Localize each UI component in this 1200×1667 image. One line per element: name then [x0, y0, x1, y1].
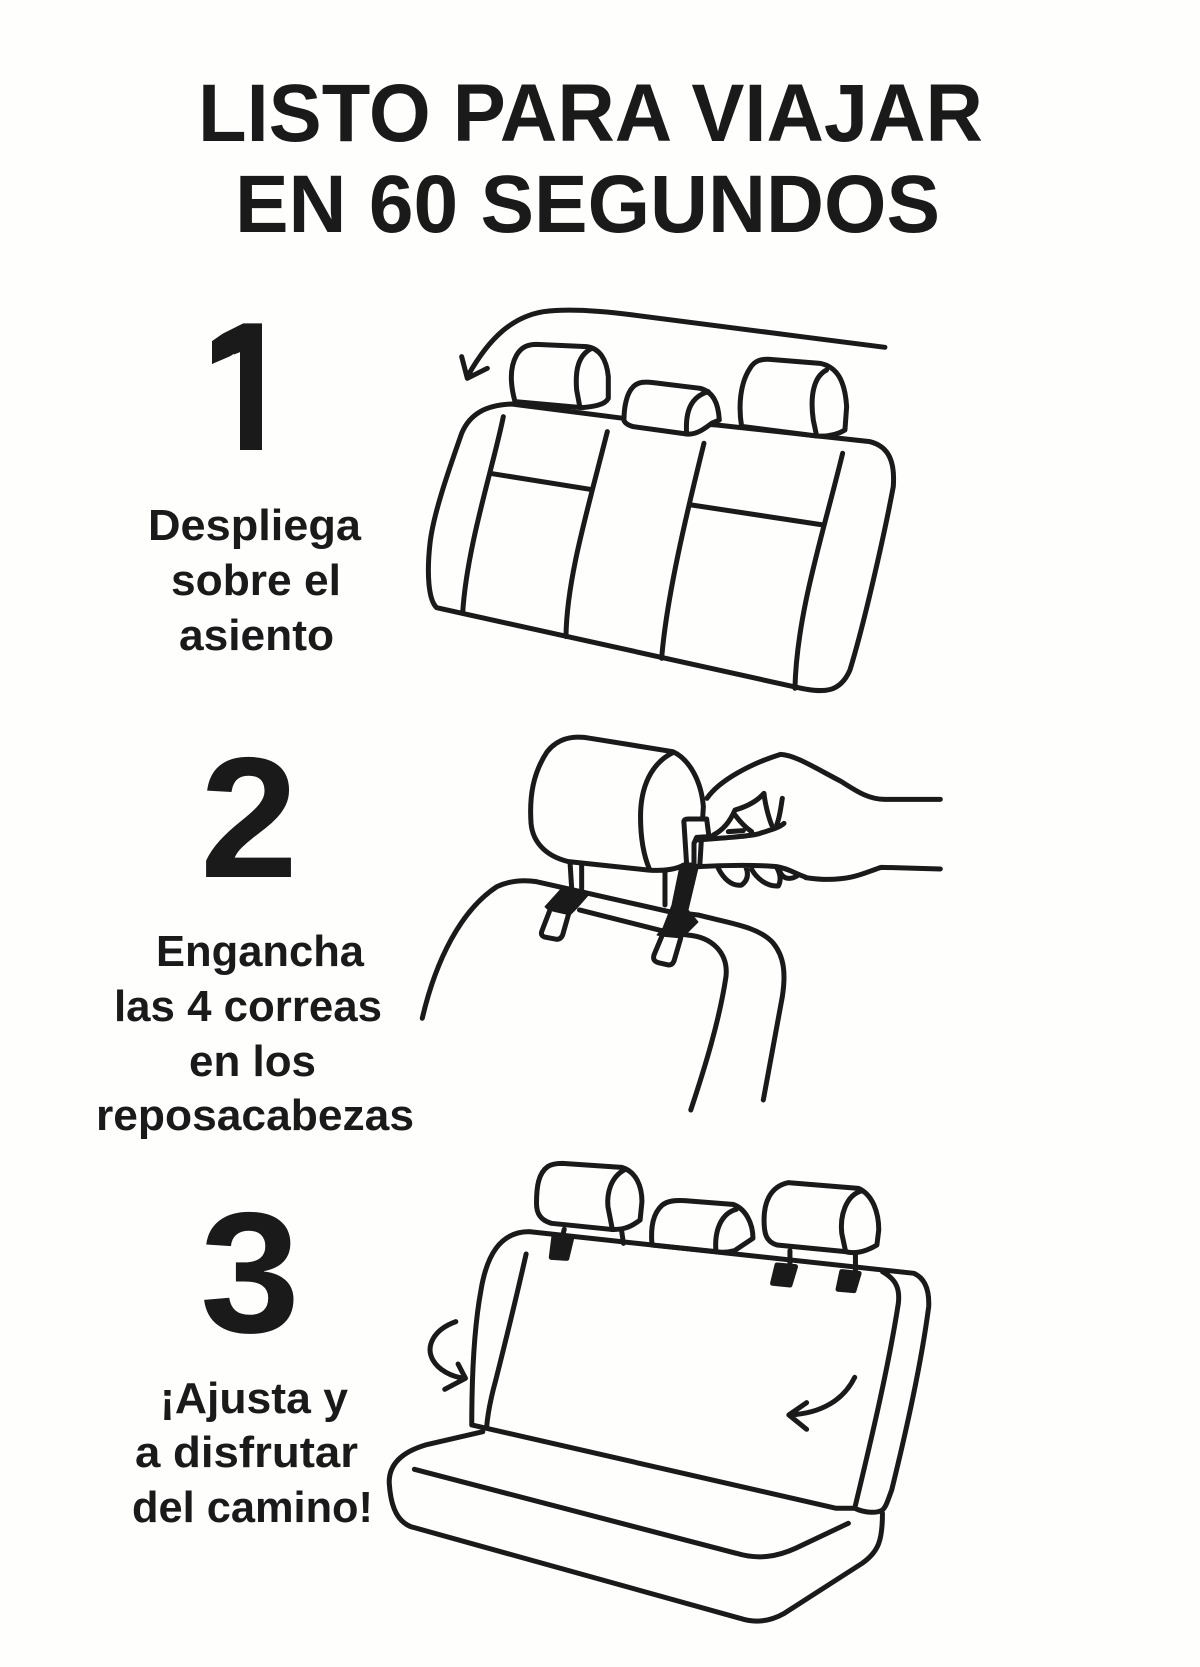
step 3 panel [132, 1163, 929, 1621]
step 2 text: Engancha [156, 927, 365, 976]
headrest [531, 737, 940, 879]
step 1 number: 1 [199, 290, 290, 486]
arrow [462, 310, 885, 378]
step 2 panel [96, 722, 940, 1140]
title: LISTO PARA VIAJAR [198, 68, 983, 159]
step 2 text: las 4 correas [114, 982, 382, 1031]
step 2 illustration: hand hooking strap on headrest [422, 737, 940, 1110]
seat outline [422, 881, 784, 1110]
step 1 illustration: seat back with unfolding arrow [428, 310, 894, 691]
cushion [389, 1432, 882, 1621]
step 2 text: en los [189, 1037, 316, 1086]
step 2 text [96, 927, 414, 1140]
step 1 text: asiento [179, 611, 334, 660]
centre headrest [624, 382, 719, 434]
step 3 text: ¡Ajusta y [160, 1374, 349, 1423]
step 1 text [148, 501, 362, 660]
right headrest [740, 359, 847, 436]
centre headrest [652, 1200, 753, 1252]
left headrest [536, 1163, 642, 1229]
right headrest [764, 1183, 879, 1253]
step 3 text: a disfrutar [135, 1428, 358, 1477]
step 2 text: reposacabezas [96, 1091, 414, 1140]
step 3 text: del camino! [132, 1483, 373, 1532]
seat cover outline [428, 404, 894, 691]
step 3 illustration: fitted seat with adjusting arrows [389, 1163, 929, 1621]
headrest posts [562, 1229, 855, 1272]
step 2 number: 2 [200, 722, 298, 914]
seat seams [463, 417, 843, 688]
title: EN 60 SEGUNDOS [235, 159, 940, 250]
fingers and strap tab [684, 793, 805, 886]
left headrest [511, 344, 608, 408]
step 1 panel [148, 290, 894, 691]
straps and clips [541, 866, 698, 965]
right arrow [789, 1377, 855, 1429]
step 3 number: 3 [200, 1177, 300, 1369]
step 1 text: sobre el [171, 556, 341, 605]
step 1 text: Despliega [148, 501, 362, 550]
title [198, 68, 983, 250]
backrest [472, 1232, 929, 1512]
step 3 text [132, 1374, 373, 1532]
strap clips [551, 1237, 859, 1291]
left arrow [430, 1322, 465, 1389]
hand and forearm [707, 754, 940, 879]
headrest posts [570, 862, 665, 905]
